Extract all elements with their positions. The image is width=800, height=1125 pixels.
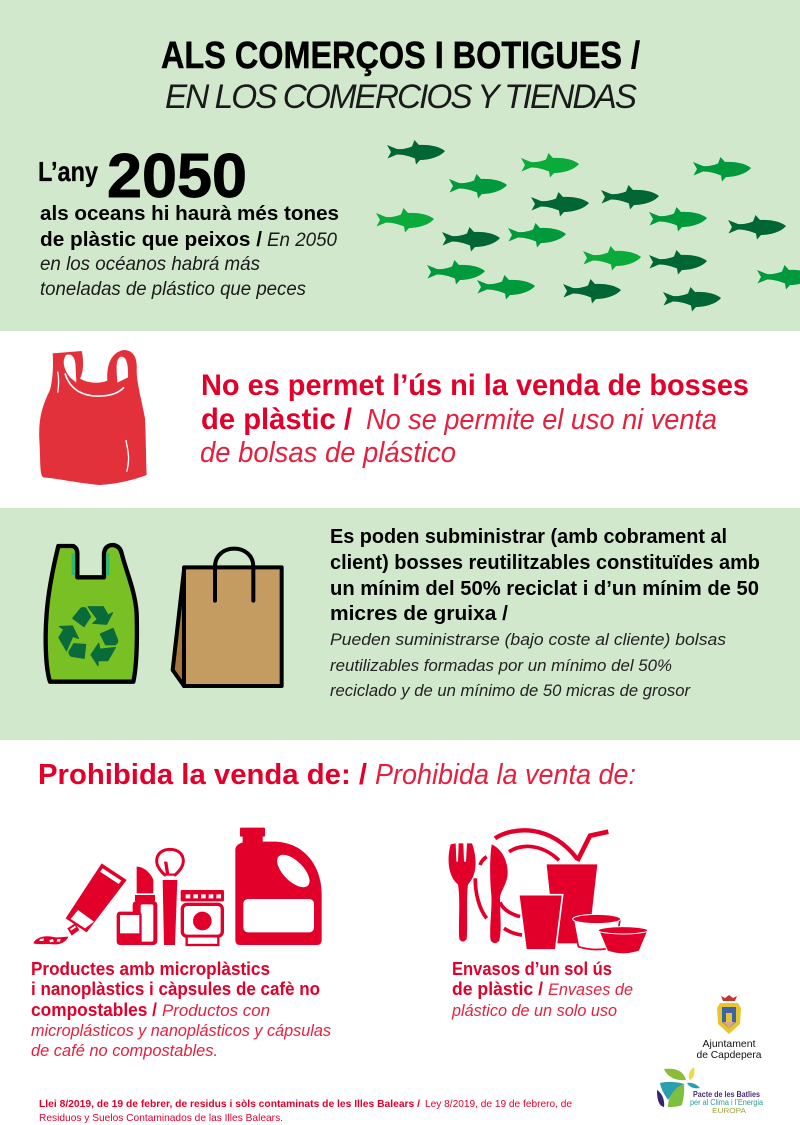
text block: 2050 statistic: L’any (38, 156, 98, 187)
text block: reusable bags allowed: reutilizables formadas por un mínimo del 50% (330, 656, 672, 675)
text block: reusable bags allowed: un mínim del 50% reciclat i d’un mínim de 50 (330, 578, 759, 600)
title: EN LOS COMERCIOS Y TIENDAS (165, 78, 637, 116)
footer: legal reference (39, 1098, 572, 1124)
text block: reusable bags allowed: reciclado y de un mínimo de 50 micras de grosor (330, 681, 691, 700)
icon: single-use tableware (449, 830, 648, 954)
text block: 2050 statistic: En 2050 (267, 230, 337, 251)
icon: paint tube (33, 863, 127, 944)
logo: Pacte de les Batlies: Pacte de les Batlies (693, 1090, 760, 1099)
icon: tall cup (547, 864, 597, 943)
logo: Pacte de les Batlies: per al Clima i l’Energia (690, 1098, 764, 1107)
heading: prohibited sales (38, 759, 636, 791)
icon: detergent bottle (235, 828, 322, 945)
text block: microplastics products: Productos con (162, 1001, 270, 1020)
icon: knife (490, 844, 508, 943)
icon: plate (475, 830, 577, 935)
text block: single-use containers: Envases de (548, 980, 633, 999)
text block: microplastics products: microplásticos y nanoplásticos y cápsulas (31, 1021, 331, 1040)
footer: legal reference: Ley 8/2019, de 19 de febrero, de (425, 1098, 572, 1110)
icon: cosmetics and detergent (33, 828, 322, 945)
text block: single-use containers: Envasos d’un sol ús (452, 959, 612, 979)
text block: microplastics products: compostables / (31, 1000, 157, 1020)
icon: leaves (657, 1067, 700, 1107)
text block: bag ban (200, 369, 749, 469)
heading: prohibited sales: Prohibida la venda de: / (38, 759, 367, 791)
text block: microplastics products: i nanoplàstics i càpsules de cafè no (31, 979, 320, 999)
text block: single-use containers: de plàstic / (452, 979, 543, 999)
heading: prohibited sales: Prohibida la venta de: (375, 759, 636, 791)
footer: legal reference: Residuos y Suelos Contaminados de las Illes Balears. (39, 1112, 283, 1124)
text block: bag ban: de plàstic / (201, 403, 353, 436)
title: ALS COMERÇOS I BOTIGUES / (161, 35, 640, 77)
text block: reusable bags allowed (330, 526, 760, 700)
icon: makeup brush (157, 849, 183, 945)
text block: microplastics products: de café no compostables. (31, 1041, 218, 1060)
text block: 2050 statistic: als oceans hi haurà més tones (40, 203, 339, 225)
text block: bag ban: No se permite el uso ni venta (366, 404, 717, 436)
icon: red plastic bag (39, 350, 147, 485)
text block: single-use containers: plástico de un solo uso (451, 1001, 617, 1020)
panel: reusable bags background (0, 508, 800, 740)
icon: straw (577, 832, 608, 861)
text block: 2050 statistic: 2050 (107, 142, 247, 211)
text block: microplastics products (31, 959, 331, 1060)
logo: Ajuntament de Capdepera: de Capdepera (696, 1049, 762, 1061)
text block: 2050 statistic: de plàstic que peixos / (40, 229, 262, 251)
text block: reusable bags allowed: client) bosses reutilitzables constituïdes amb (330, 552, 760, 574)
icon: front bowl (599, 932, 647, 954)
text block: 2050 statistic: toneladas de plástico que peces (40, 279, 306, 300)
logo: Pacte de les Batlies (657, 1067, 764, 1115)
text block: bag ban: de bolsas de plástico (200, 437, 456, 469)
text block: single-use containers (451, 959, 633, 1020)
icon: green reusable bag (46, 545, 137, 682)
icon: school of fish (376, 140, 800, 312)
logo: Ajuntament de Capdepera (696, 995, 762, 1061)
text block: 2050 statistic: en los océanos habrá más (40, 254, 260, 275)
text block: reusable bags allowed: Es poden subministrar (amb cobrament al (330, 526, 727, 548)
panel: oceans background (0, 0, 800, 331)
icon: front cup (519, 895, 563, 950)
footer: legal reference: Llei 8/2019, de 19 de febrer, de residus i sòls contaminats de les Illes Balears / (39, 1098, 420, 1110)
icon: crest (717, 995, 741, 1034)
logo: Pacte de les Batlies: EUROPA (712, 1108, 746, 1115)
text block: 2050 statistic (38, 142, 339, 300)
icon: back bowl (573, 920, 620, 949)
text block: microplastics products: Productes amb microplàstics (31, 959, 270, 979)
icon: paper bag (173, 549, 282, 686)
text block: reusable bags allowed: Pueden suministrarse (bajo coste al cliente) bolsas (330, 630, 727, 649)
icon: lipstick (117, 867, 157, 945)
icon: fork (449, 843, 476, 942)
title (161, 35, 640, 116)
logo: Ajuntament de Capdepera: Ajuntament (702, 1038, 756, 1050)
text block: bag ban: No es permet l’ús ni la venda de bosses (201, 369, 749, 402)
icon: jar (181, 890, 224, 945)
text block: reusable bags allowed: micres de gruixa / (330, 603, 508, 625)
